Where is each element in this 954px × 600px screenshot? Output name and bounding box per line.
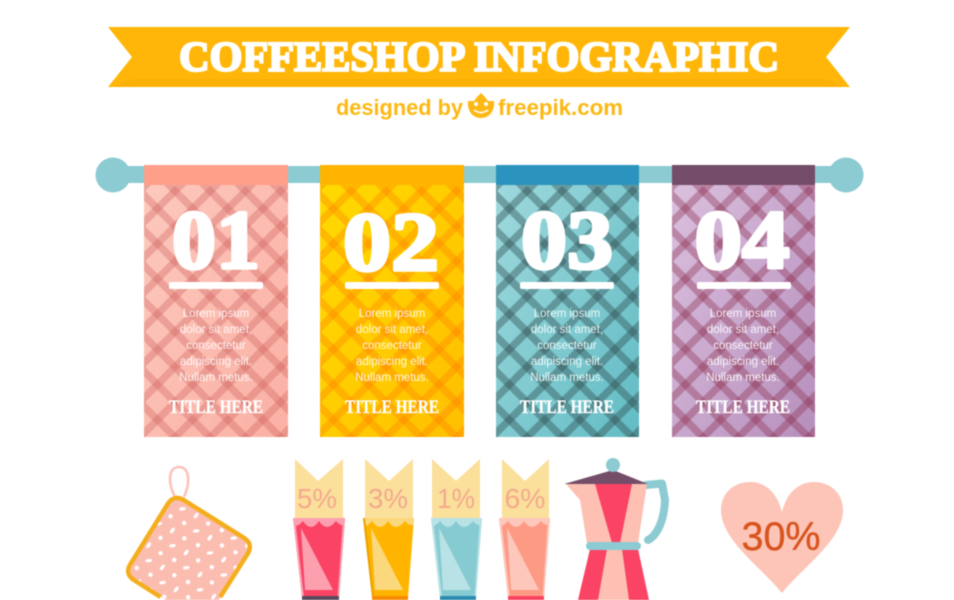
cup body <box>293 518 345 597</box>
percentage: 3% <box>368 483 408 514</box>
body text: adipiscing elit. <box>707 356 779 368</box>
icon: pot holder <box>128 467 250 600</box>
panel header strip <box>496 165 639 185</box>
cup body <box>499 518 550 597</box>
cup: 5% <box>293 459 345 600</box>
paper label <box>365 459 413 518</box>
ribbon shape <box>108 27 850 87</box>
number: 04 <box>694 194 790 287</box>
percentage: 1% <box>437 483 475 514</box>
cup: 3% <box>363 459 414 600</box>
number: 01 <box>172 194 260 287</box>
cup base <box>372 596 408 600</box>
body text: Lorem ipsum <box>710 308 776 320</box>
body text: adipiscing elit. <box>356 356 428 368</box>
panel header strip <box>144 165 288 185</box>
cup base <box>302 596 339 600</box>
body text: Nullam metus. <box>530 372 604 384</box>
body text: dolor sit amet, <box>531 324 603 336</box>
cup: 6% <box>499 459 550 600</box>
body text: adipiscing elit. <box>180 356 252 368</box>
body text: consectetur <box>713 340 773 352</box>
freepik text: freepik.com <box>498 95 623 120</box>
panel header strip <box>320 165 464 185</box>
body text: Nullam metus. <box>355 372 429 384</box>
panel title: TITLE HERE <box>696 398 790 418</box>
percentage: 5% <box>297 483 337 514</box>
designed by text: designed by <box>336 95 464 120</box>
body text: consectetur <box>537 340 597 352</box>
body text: Lorem ipsum <box>534 308 600 320</box>
body text: Lorem ipsum <box>183 308 249 320</box>
knob <box>606 458 620 472</box>
panel title: TITLE HERE <box>520 398 614 418</box>
body text: adipiscing elit. <box>531 356 603 368</box>
lid <box>564 470 648 484</box>
number: 02 <box>343 196 439 289</box>
underline <box>345 282 439 289</box>
percentage: 30% <box>742 515 820 559</box>
panel title: TITLE HERE <box>345 398 439 418</box>
panel title: TITLE HERE <box>169 398 263 418</box>
underline <box>520 282 614 289</box>
body text: Nullam metus. <box>706 372 780 384</box>
paper label <box>295 459 343 518</box>
icon: freepik mascot <box>468 93 494 118</box>
body text: dolor sit amet, <box>356 324 428 336</box>
panel: 04 <box>672 165 815 437</box>
handle <box>646 484 665 540</box>
lower body <box>578 549 649 600</box>
underline <box>169 282 263 289</box>
cup base <box>508 596 544 600</box>
title text: COFFEESHOP INFOGRAPHIC <box>179 35 779 81</box>
upper body <box>566 484 647 543</box>
hanging rod <box>96 158 864 192</box>
panel: 01 <box>144 165 288 437</box>
cup body <box>363 518 414 597</box>
paper label <box>502 459 549 518</box>
body text: dolor sit amet, <box>707 324 779 336</box>
cup base <box>440 596 476 600</box>
cup body <box>431 518 482 597</box>
paper label <box>432 459 480 518</box>
icon: moka pot <box>564 458 665 600</box>
body text: dolor sit amet, <box>180 324 252 336</box>
credit line <box>336 93 623 120</box>
body text: consectetur <box>186 340 246 352</box>
waist band <box>586 542 641 550</box>
cup: 1% <box>431 459 482 600</box>
body text: Nullam metus. <box>179 372 253 384</box>
underline <box>697 282 791 289</box>
body text: consectetur <box>362 340 422 352</box>
number: 03 <box>521 194 613 287</box>
heart: 30% <box>721 482 843 593</box>
body text: Lorem ipsum <box>359 308 425 320</box>
panel header strip <box>672 165 815 185</box>
panel: 02 <box>320 165 464 437</box>
panel: 03 <box>496 165 639 437</box>
title banner <box>108 27 850 87</box>
percentage: 6% <box>504 483 546 514</box>
